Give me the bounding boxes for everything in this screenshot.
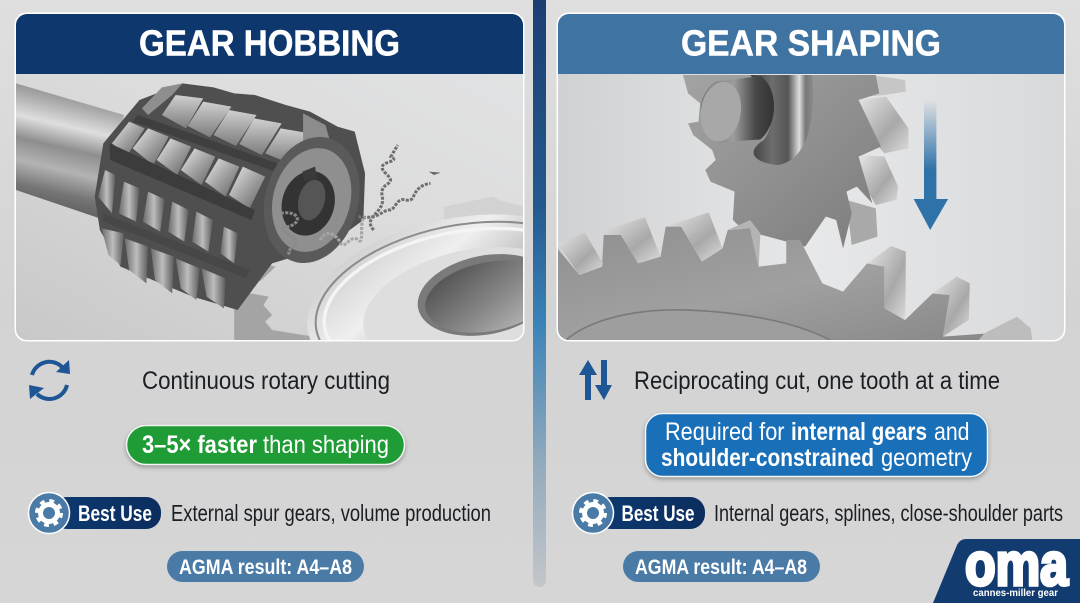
motion arrow [914, 100, 948, 230]
shaping card frame [556, 12, 1066, 342]
badge: AGMA shaping [623, 551, 820, 582]
callout: required for internal gears: geometry [881, 444, 972, 472]
large gear hub [564, 310, 833, 342]
callout: faster [126, 426, 404, 464]
middle row teeth [98, 170, 115, 213]
dark bar 1 [133, 115, 277, 172]
shaping header bar [558, 14, 1064, 74]
workpiece teeth [234, 266, 310, 340]
front face [264, 137, 360, 263]
best use pill [52, 497, 161, 529]
best use label: Best Use [622, 501, 694, 526]
badge: AGMA hobbing [167, 551, 364, 582]
callout: required for internal gears [646, 414, 988, 476]
icon: gear [572, 492, 614, 534]
badge: AGMA hobbing: AGMA result: A4–A8 [179, 556, 352, 579]
callout: faster: 3–5× faster [142, 431, 257, 459]
panel: gear hobbing [14, 12, 524, 342]
callout: required for internal gears: and [934, 418, 970, 446]
logo: cannes-miller gear: cannes-miller gear [973, 587, 1058, 599]
callout: required for internal gears: internal gears [791, 418, 927, 446]
bright teeth [112, 122, 145, 155]
hob body [95, 83, 365, 310]
dark bar 3 [108, 216, 250, 273]
text: continuous rotary cutting: Continuous rotary cutting [142, 367, 390, 395]
callout: required for internal gears: shoulder-constrained [661, 444, 874, 472]
best use label: Best Use [78, 501, 152, 526]
bottom row teeth [102, 228, 124, 265]
callout: faster: than shaping [263, 431, 389, 459]
chips [281, 145, 430, 255]
icon: up and down arrows [579, 360, 612, 400]
center divider [533, 0, 546, 587]
text: reciprocating cut: Reciprocating cut, one tooth at a time [634, 367, 1000, 395]
shaping title: GEAR SHAPING [681, 22, 941, 64]
callout: required for internal gears: Required for [665, 418, 784, 446]
icon: rotation arrows [29, 360, 70, 399]
best use: hobbing [28, 492, 161, 534]
shaping photo illustration [557, 74, 1064, 342]
flange [750, 75, 813, 165]
hobbing title: GEAR HOBBING [139, 22, 400, 64]
panel: gear shaping [556, 12, 1066, 342]
best use pill [596, 497, 705, 529]
icon: gear [28, 492, 70, 534]
dark bar 2 [110, 143, 255, 220]
large gear front face [558, 226, 984, 340]
large gear tooth lands and flanks [563, 233, 603, 275]
text: external spur gears: External spur gears, volume production [171, 500, 491, 526]
hobbing photo illustration [16, 74, 523, 340]
shaft [701, 76, 774, 143]
small gear tooth flanks [867, 75, 906, 97]
hobbing header bar [16, 14, 523, 74]
badge: AGMA shaping: AGMA result: A4–A8 [635, 556, 807, 579]
top row teeth [162, 95, 203, 128]
small gear face [683, 75, 881, 248]
hobbing card frame [14, 12, 524, 342]
best use: shaping [572, 492, 705, 534]
